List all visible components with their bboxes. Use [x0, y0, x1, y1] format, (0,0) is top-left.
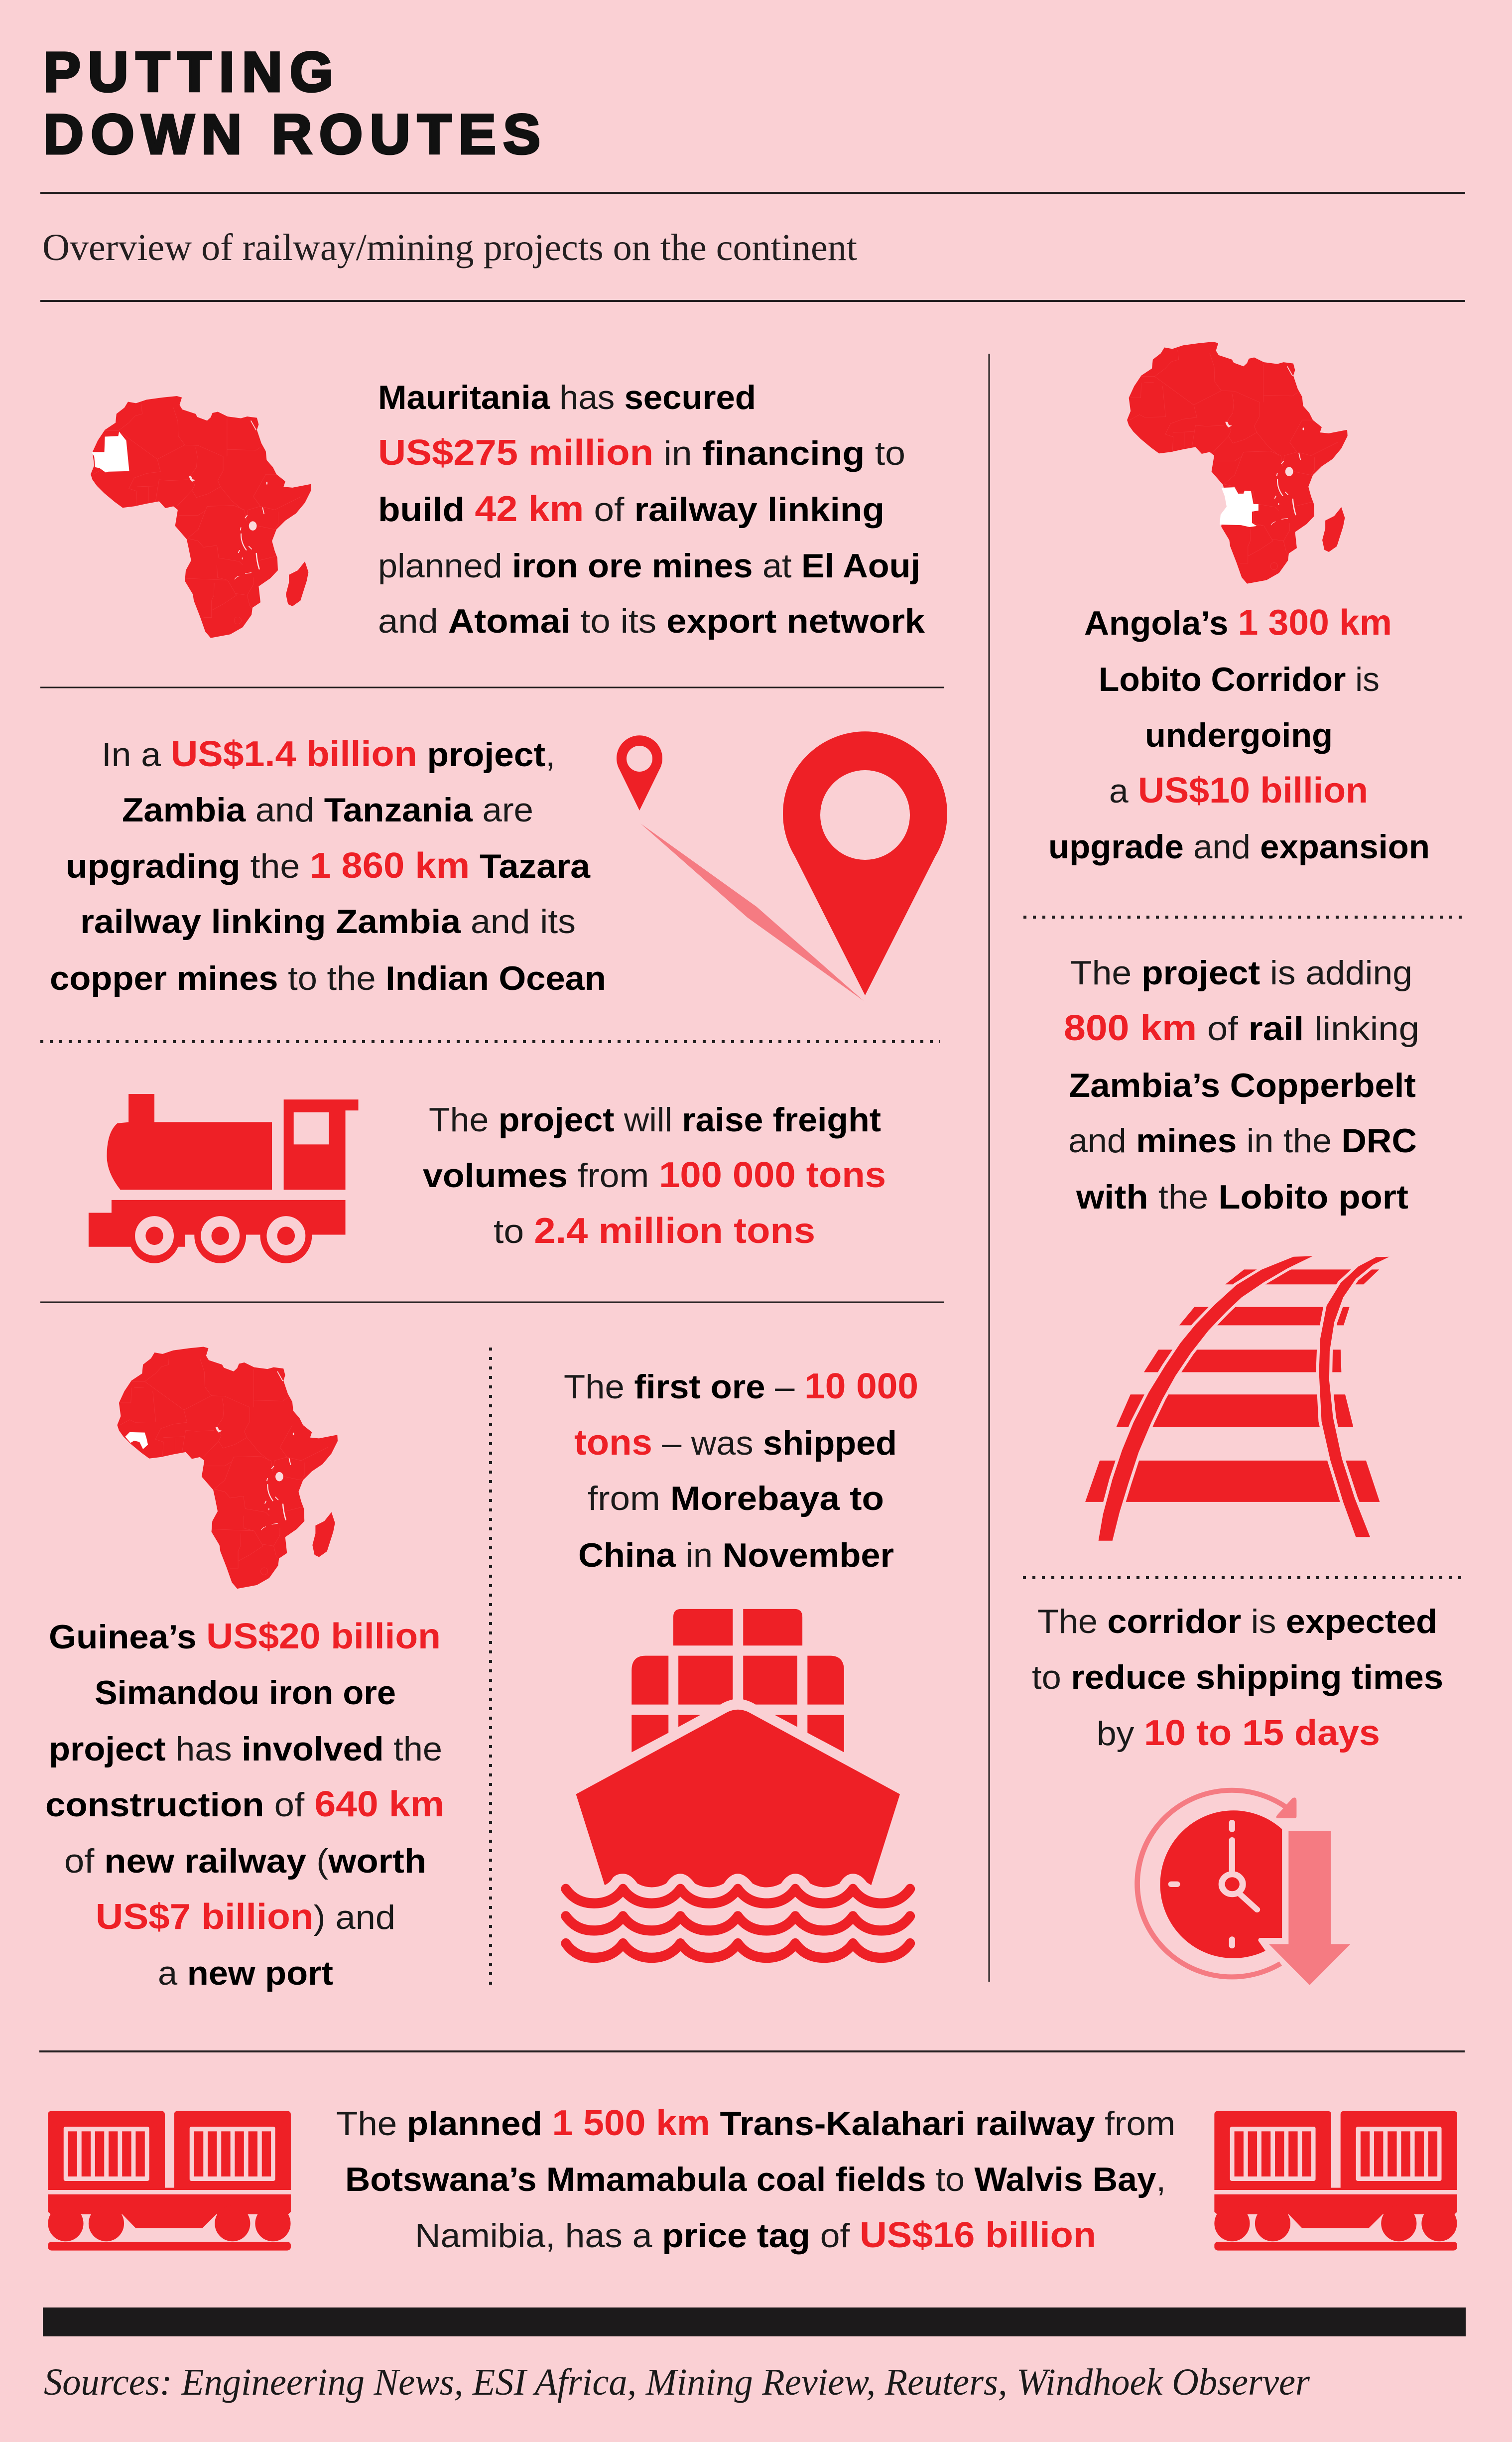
text: Mauritania financing: build 42 km of railway linking — [378, 489, 884, 529]
icon: freight wagon right — [1214, 2111, 1457, 2251]
icon: map pins — [617, 731, 947, 1001]
text: first ore shipment — [564, 1366, 918, 1574]
panel: Tazara — [50, 731, 947, 1001]
icon: locomotive — [89, 1094, 359, 1263]
text: Lobito Corridor: upgrade and expansion — [1048, 828, 1430, 866]
text: Mauritania financing: planned iron ore mines at El Aouj — [378, 547, 920, 585]
text: Tazara railway: In a US$1.4 billion project, — [102, 734, 555, 774]
text: Simandou project: a new port — [158, 1954, 333, 1992]
panel: Mauritania — [91, 379, 925, 640]
panel: Copperbelt link — [1064, 954, 1419, 1541]
title: DOWN ROUTES — [43, 103, 540, 165]
text: Simandou project: project has involved the — [49, 1730, 442, 1768]
text: Simandou project — [45, 1617, 444, 1992]
text: Trans-Kalahari railway: The planned 1 500 km Trans-Kalahari railway from — [336, 2103, 1175, 2143]
text: Tazara railway: Zambia and Tanzania are — [122, 791, 533, 829]
text: Tazara railway: copper mines to the Indian Ocean — [50, 959, 606, 997]
text: Lobito Corridor: undergoing — [1145, 716, 1333, 754]
text: first ore shipment: tons – was shipped — [574, 1423, 897, 1463]
icon: clock with down arrow — [1137, 1790, 1351, 1985]
footer bar — [43, 2307, 1466, 2336]
text: Copperbelt link: The project is adding — [1070, 954, 1412, 992]
panel: Angola — [1048, 342, 1430, 866]
text: Mauritania financing: Mauritania has secured — [378, 379, 756, 416]
text: shipping times: by 10 to 15 days — [1097, 1713, 1380, 1753]
text: Copperbelt link — [1064, 954, 1419, 1216]
text: first ore shipment: China in November — [578, 1536, 894, 1574]
text: Simandou project: of new railway (worth — [64, 1842, 426, 1880]
subtitle: Overview of railway/mining projects on the continent — [42, 227, 857, 269]
panel: Guinea — [45, 1347, 444, 1992]
text: shipping times: to reduce shipping times — [1032, 1658, 1443, 1696]
text: freight volumes: to 2.4 million tons — [494, 1211, 815, 1251]
text: Copperbelt link: with the Lobito port — [1076, 1178, 1408, 1216]
text: first ore shipment: The first ore – 10 000 — [564, 1366, 918, 1406]
text: Simandou project: Guinea’s US$20 billion — [49, 1617, 441, 1656]
text: Copperbelt link: Zambia’s Copperbelt — [1069, 1067, 1416, 1104]
text: Copperbelt link: 800 km of rail linking — [1064, 1008, 1419, 1048]
text: Trans-Kalahari railway: Botswana’s Mmamabula coal fields to Walvis Bay, — [345, 2161, 1166, 2198]
text: freight volumes — [423, 1101, 886, 1251]
text: Simandou project: US$7 billion ) and — [96, 1897, 395, 1937]
text: Mauritania financing: US$275 million in financing to — [378, 433, 905, 473]
text: first ore shipment: from Morebaya to — [588, 1480, 884, 1517]
panel: first ore shipment — [564, 1366, 918, 1958]
text: Tazara railway: railway linking Zambia and its — [80, 903, 576, 941]
text: Trans-Kalahari railway — [336, 2103, 1175, 2255]
text: Lobito Corridor: a US$10 billion — [1109, 771, 1368, 811]
text: Trans-Kalahari railway: Namibia, has a price tag of US$16 billion — [415, 2215, 1096, 2255]
text: Simandou project: construction of 640 km — [45, 1784, 444, 1824]
text: shipping times — [1032, 1603, 1443, 1753]
text: shipping times: The corridor is expected — [1037, 1603, 1437, 1640]
text: Simandou project: Simandou iron ore — [95, 1674, 396, 1712]
icon: Africa map with Angola highlighted — [1127, 342, 1348, 584]
text: Tazara railway: upgrading the 1 860 km Tazara — [66, 846, 591, 886]
title: PUTTING — [43, 41, 333, 103]
text: Tazara railway — [50, 734, 606, 997]
icon: Africa map with Mauritania highlighted — [91, 396, 311, 638]
text: Lobito Corridor: Lobito Corridor is — [1099, 661, 1380, 698]
text: Lobito Corridor — [1048, 603, 1430, 866]
text: Lobito Corridor: Angola’s 1 300 km — [1084, 603, 1392, 643]
text: Mauritania financing: and Atomai to its export network — [378, 602, 925, 640]
panel: Trans-Kalahari railway — [48, 2103, 1457, 2255]
panel: shipping times — [1032, 1603, 1443, 1985]
icon: railway track — [1085, 1256, 1389, 1541]
text: Mauritania financing — [378, 379, 925, 640]
icon: Africa map with Guinea highlighted — [117, 1347, 338, 1589]
icon: freight wagon left — [48, 2111, 291, 2251]
text: freight volumes: volumes from 100 000 tons — [423, 1155, 886, 1195]
icon: container ship — [566, 1609, 910, 1958]
title — [43, 41, 540, 165]
text: freight volumes: The project will raise freight — [429, 1101, 881, 1139]
text: Copperbelt link: and mines in the DRC — [1068, 1122, 1417, 1160]
sources: Sources: Engineering News, ESI Africa, Mining Review, Reuters, Windhoek Observer — [44, 2361, 1310, 2403]
panel: freight volumes — [89, 1094, 886, 1263]
